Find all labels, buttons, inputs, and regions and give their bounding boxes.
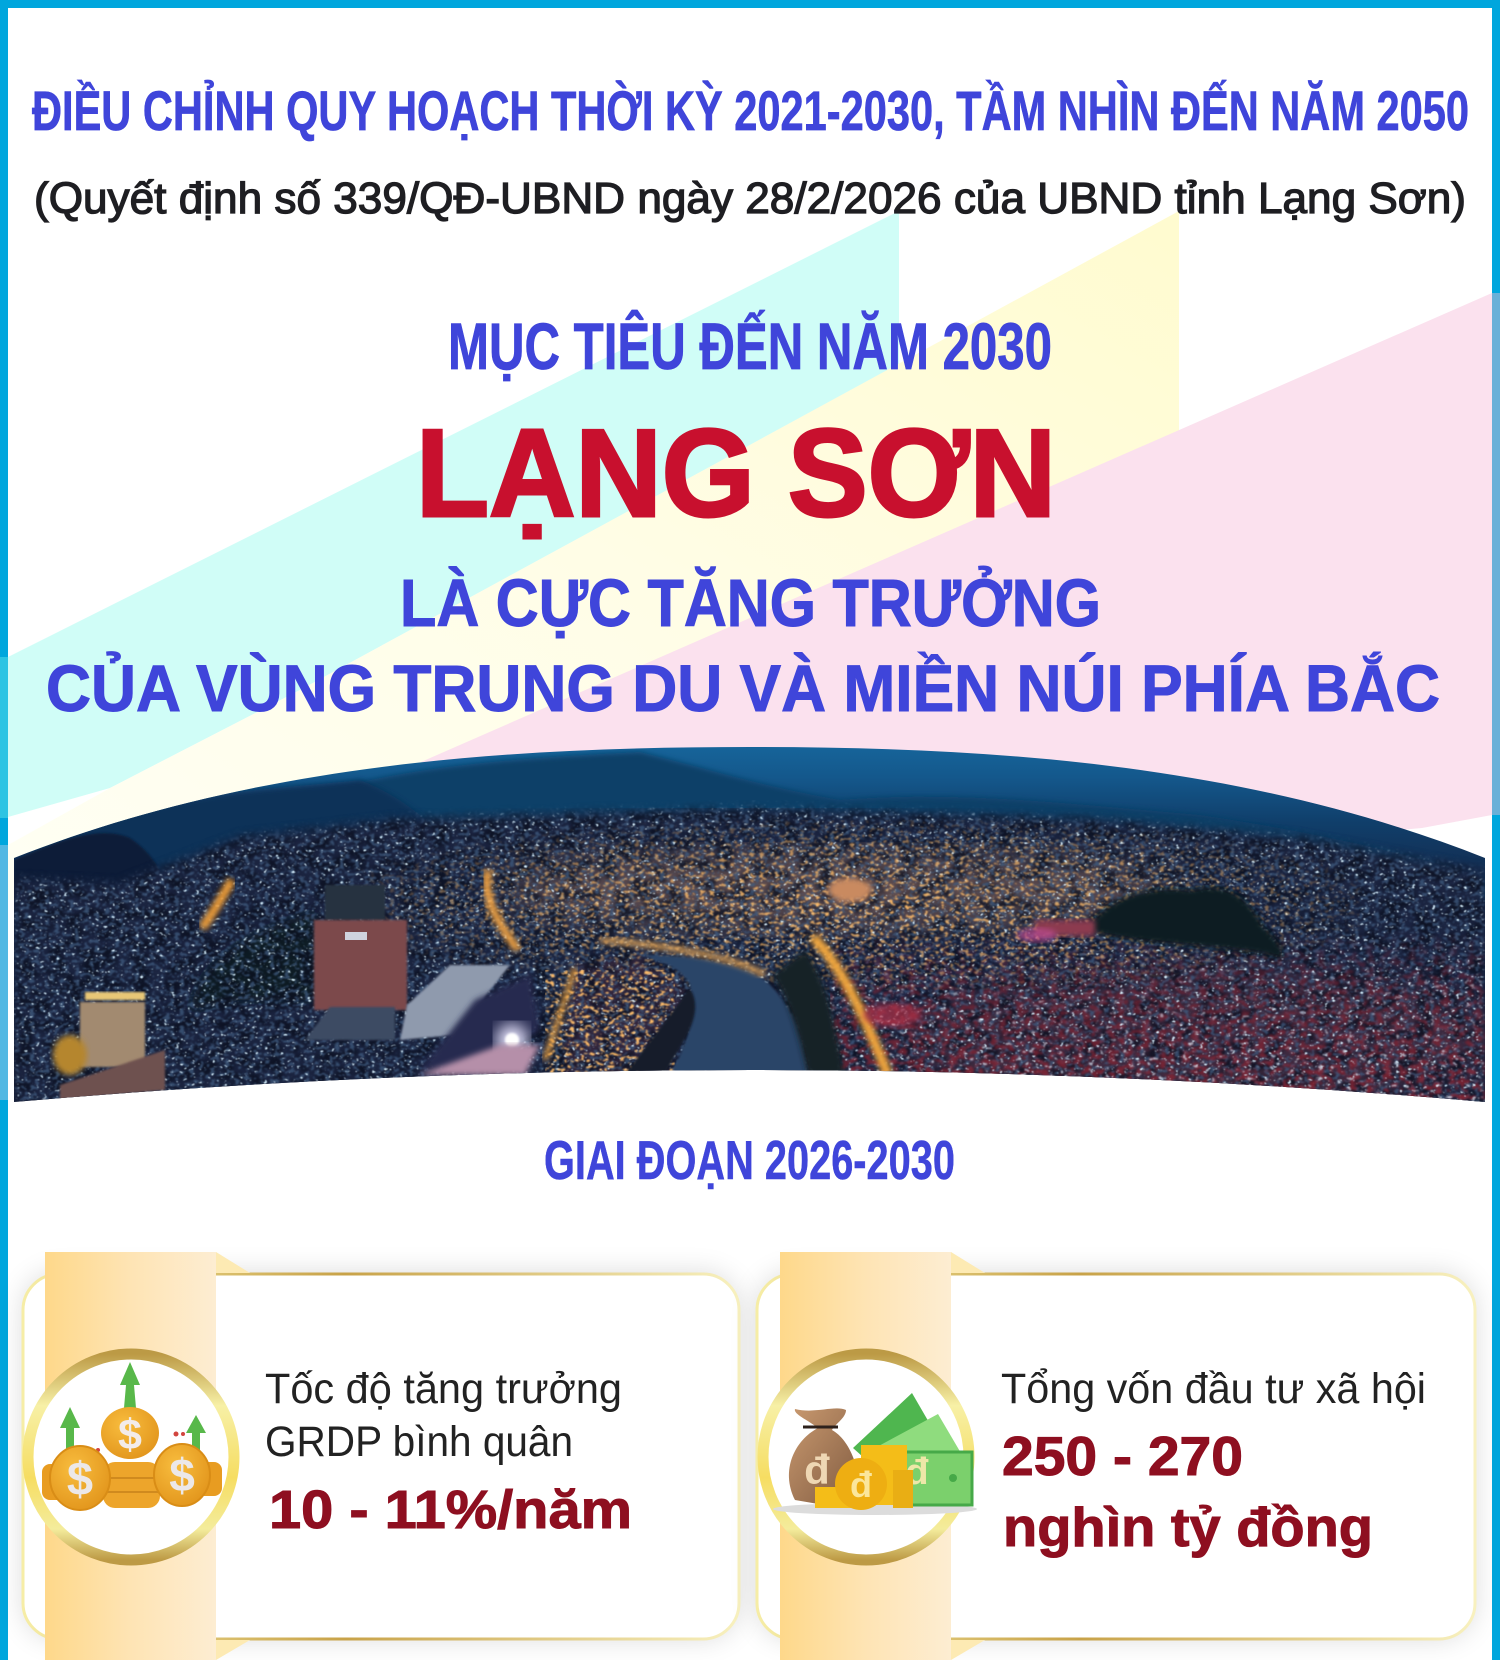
heading: growth pole line 2: CỦA VÙNG TRUNG DU VÀ MIỀN NÚI PHÍA BẮC (46, 651, 1440, 725)
icon: coins with rising arrows: $ (169, 1449, 195, 1501)
gold side strip (780, 1252, 985, 1660)
heading: growth pole line 1: LÀ CỰC TĂNG TRƯỞNG (400, 566, 1101, 641)
value: 250-270: 250 - 270 (1002, 1425, 1243, 1487)
label: average GRDP: GRDP bình quân (265, 1418, 573, 1466)
icon: money bag, cash and coins: đ (804, 1446, 830, 1493)
background: pink diagonal band (421, 293, 1492, 900)
subtitle: decision reference: (Quyết định số 339/QĐ-UBND ngày 28/2/2026 của UBND tỉnh Lạng Sơn) (34, 174, 1466, 223)
icon: money bag, cash and coins (763, 1354, 977, 1560)
heading: target to 2030: MỤC TIÊU ĐẾN NĂM 2030 (448, 309, 1052, 383)
photo: Lang Son city at night (0, 740, 1500, 1110)
background: mint diagonal band (8, 211, 899, 817)
icon: money bag, cash and coins: đ (850, 1464, 872, 1505)
gold side strip (45, 1252, 250, 1660)
value: thousand billion dong: nghìn tỷ đồng (1003, 1496, 1373, 1558)
heading: Lang Son: LẠNG SƠN (416, 405, 1056, 543)
panel: GRDP growth (23, 1252, 739, 1660)
icon: coins with rising arrows (28, 1354, 234, 1560)
value: 10-11% per year: 10 - 11%/năm (269, 1480, 632, 1540)
background: cream diagonal band (8, 211, 1179, 900)
card body (757, 1273, 1475, 1639)
label: growth rate: Tốc độ tăng trưởng (265, 1365, 622, 1413)
icon: coins with rising arrows: $ (67, 1452, 93, 1505)
icon: money bag, cash and coins: đ (905, 1451, 929, 1493)
card body (23, 1273, 739, 1639)
label: total social investment: Tổng vốn đầu tư xã hội (1001, 1365, 1426, 1413)
panel: total social investment (757, 1252, 1475, 1660)
heading: period 2026-2030: GIAI ĐOẠN 2026-2030 (544, 1129, 955, 1191)
icon: coins with rising arrows: $ (118, 1411, 142, 1459)
